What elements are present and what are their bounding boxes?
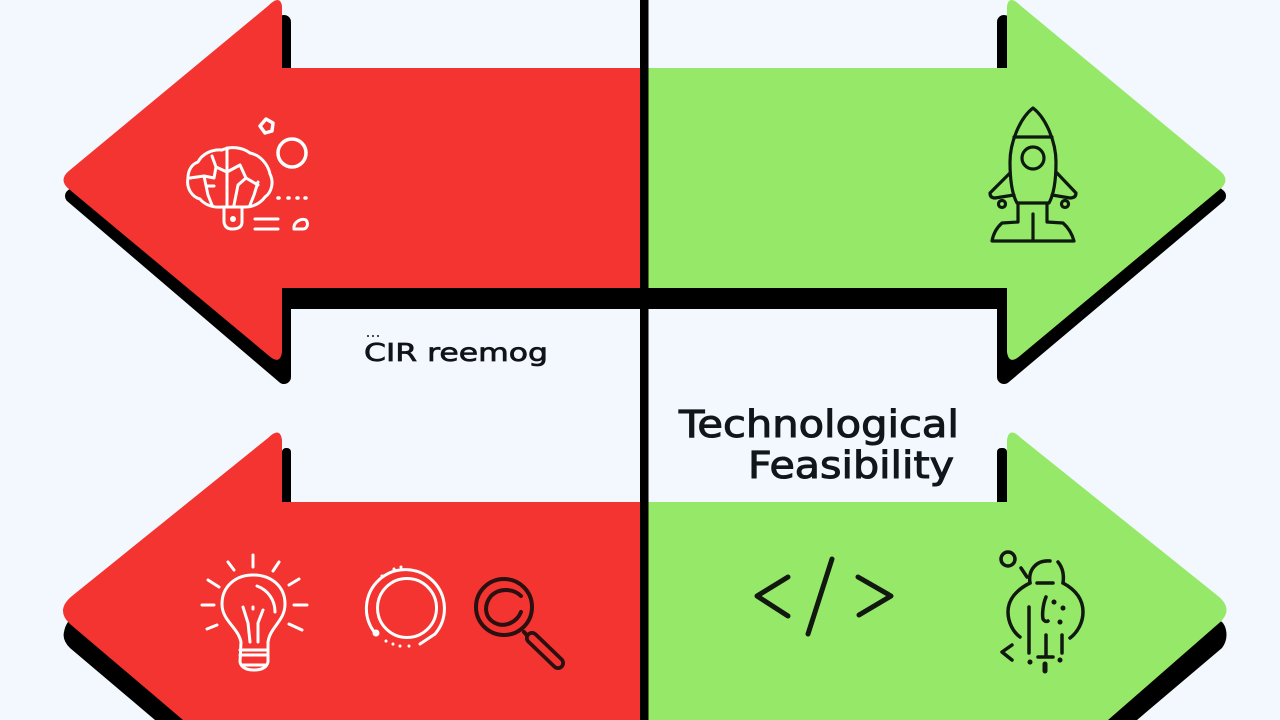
center divider <box>640 0 648 720</box>
green arrow bottom <box>648 432 1226 720</box>
icon: magnifying glass <box>476 579 558 663</box>
gaps above arrows <box>292 0 997 502</box>
icon: code brackets <box>757 559 891 634</box>
icon: astronaut robot <box>1001 552 1083 671</box>
red arrow top <box>64 0 640 360</box>
heading: Technological Feasibility <box>678 403 959 487</box>
icon: light bulb <box>202 555 307 670</box>
icon: rocket <box>990 108 1076 241</box>
upper arrow shadows <box>72 22 1219 377</box>
icon: ring <box>366 567 444 646</box>
lower arrow shadows <box>64 448 1227 720</box>
heading: Technological Feasibility: Feasibility <box>748 444 954 487</box>
label: CIR reemog: CIR reemog <box>364 338 548 367</box>
horizontal band <box>284 288 1005 309</box>
red arrow bottom <box>63 432 640 720</box>
green arrow top <box>648 0 1226 360</box>
heading: Technological Feasibility: Technological <box>678 403 959 446</box>
icon: brain <box>188 119 307 229</box>
